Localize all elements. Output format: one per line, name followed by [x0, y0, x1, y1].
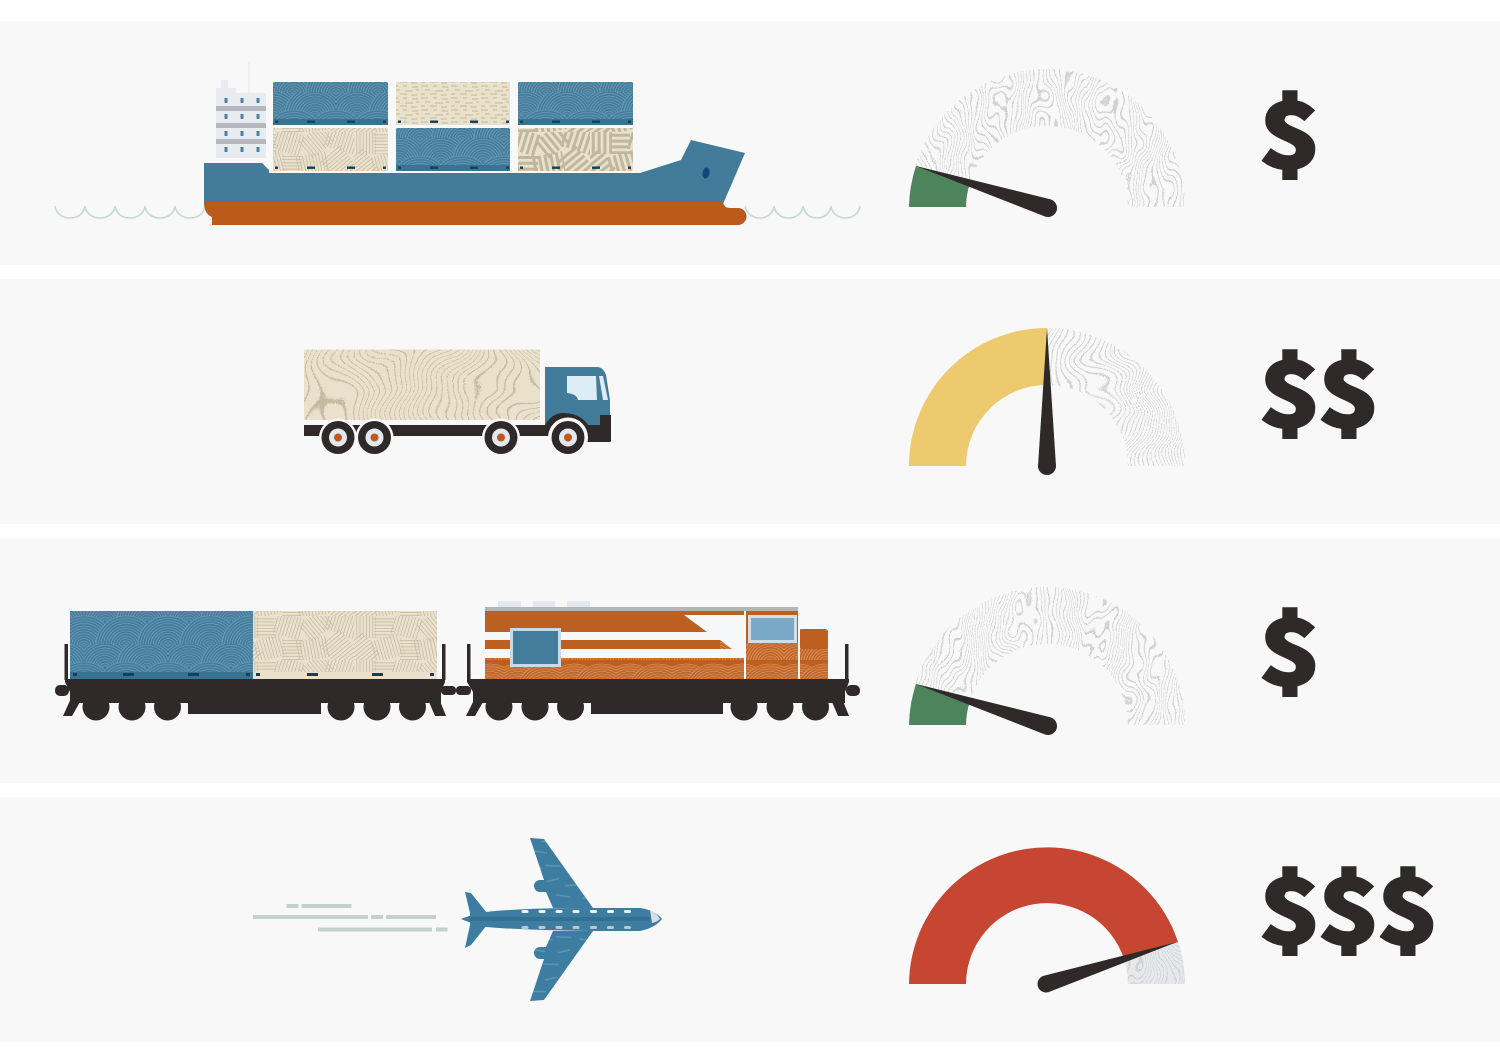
plane windows: [522, 910, 631, 913]
ship superstructure: [216, 62, 266, 158]
truck wheels: [319, 418, 588, 458]
gauge green sector: [909, 684, 970, 725]
cost: one dollar sign: $: [1260, 583, 1320, 710]
icon: airplane: [461, 838, 662, 1001]
plane cockpit: [650, 910, 660, 923]
panel: train row: [55, 587, 1316, 735]
ship porthole: [702, 167, 710, 179]
gauge needle: [916, 166, 1057, 217]
train locomotive: [466, 601, 860, 720]
panel: ship row: [54, 62, 1316, 225]
truck cargo box: [304, 350, 540, 420]
icon: truck: [304, 350, 611, 454]
gauge green sector: [909, 166, 970, 207]
gauge needle: [916, 684, 1057, 735]
plane fuselage: [461, 908, 662, 931]
gauge yellow sector: [909, 328, 1047, 466]
locomotive side window: [512, 630, 560, 666]
icon: water waves: [55, 206, 860, 218]
locomotive cab window: [750, 616, 796, 642]
plane tail fins: [465, 892, 487, 948]
train freight car: [55, 611, 471, 720]
gauge: high speed, red: [909, 847, 1185, 992]
truck cab: [545, 367, 610, 425]
gauge: medium speed, yellow: [909, 328, 1185, 475]
plane wings: [530, 838, 593, 1001]
truck windshield: [599, 376, 608, 400]
gauge needle: [1038, 942, 1177, 993]
icon: freight train: [55, 601, 860, 720]
ship blue hull: [204, 140, 745, 204]
cost: two dollar signs: $$: [1260, 325, 1379, 452]
gauge: low speed, green: [909, 69, 1184, 217]
panel: plane row: [253, 838, 1434, 1001]
icon: container ship: [204, 62, 746, 225]
icon: speed lines: [253, 904, 448, 932]
cost: one dollar sign: $: [1260, 66, 1320, 193]
truck window: [567, 376, 597, 400]
truck bed: [304, 425, 594, 436]
gauge: low speed, green: [909, 587, 1185, 735]
truck wheel arch and bumper: [545, 413, 611, 442]
ship containers: [273, 82, 633, 171]
ship orange keel: [204, 202, 746, 225]
gauge needle: [1038, 328, 1056, 475]
cost: three dollar signs: $$$: [1260, 842, 1438, 969]
gauge red sector: [909, 847, 1178, 984]
panel: truck row: [304, 328, 1374, 475]
